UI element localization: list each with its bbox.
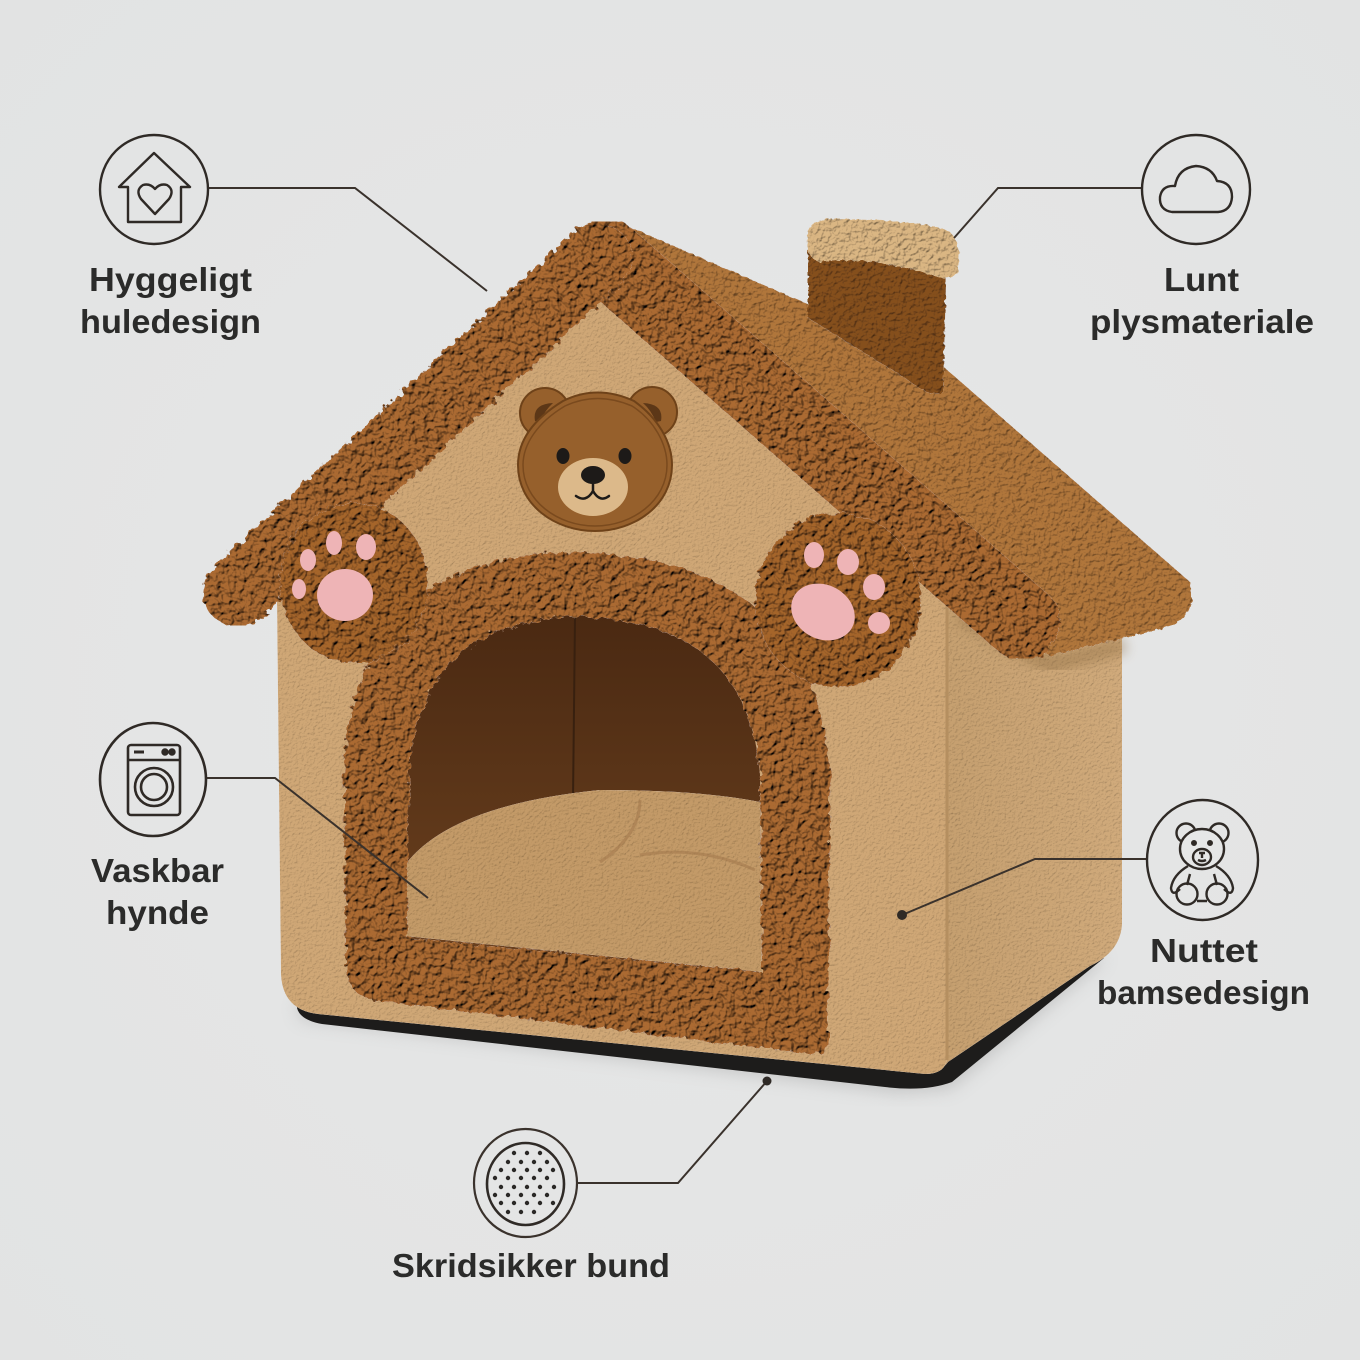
callout: Nuttet bamsedesign (897, 800, 1310, 1011)
label: plysmateriale (1090, 303, 1314, 340)
icon: washing machine (100, 723, 206, 836)
label: huledesign (80, 303, 261, 340)
callout: Skridsikker bund (392, 1076, 772, 1284)
leader line (206, 778, 428, 898)
roof right plane (600, 225, 1192, 656)
label: Vaskbar (91, 852, 224, 889)
leader line (578, 1081, 767, 1183)
label: Lunt (1164, 261, 1239, 298)
back corner of interior (573, 617, 575, 800)
door trim (344, 552, 830, 1054)
callout: Hyggeligt huledesign (80, 135, 487, 340)
product: bear pet house (238, 219, 1192, 1092)
floor shadow (300, 950, 1105, 1092)
shadow under roof on side wall (960, 615, 1125, 665)
front corner seam (946, 600, 948, 1060)
cushion (405, 790, 762, 972)
roof ridge trim left (238, 258, 597, 592)
left paw (280, 503, 428, 663)
label: bamsedesign (1097, 974, 1310, 1011)
chimney (807, 219, 959, 393)
side wall (942, 585, 1122, 1068)
label: hynde (106, 894, 209, 931)
right paw (755, 513, 921, 687)
icon: cloud (1142, 135, 1250, 244)
icon: house with heart (100, 135, 208, 244)
leader line (902, 859, 1148, 915)
leader line (208, 188, 487, 291)
leader line (954, 188, 1142, 238)
icon: teddy bear (1147, 800, 1258, 920)
black non-slip base (297, 900, 1104, 1089)
label: Skridsikker bund (392, 1247, 670, 1284)
chimney cap (807, 219, 959, 278)
cushion tuft (600, 800, 755, 870)
front wall (277, 262, 948, 1074)
embroidered bear face (518, 387, 677, 531)
door opening (405, 615, 762, 975)
callout: Lunt plysmateriale (954, 135, 1314, 340)
roof ridge trim right (608, 258, 1022, 622)
pointer dot (897, 910, 907, 920)
icon: dotted non-slip sole (474, 1129, 577, 1237)
label: Hyggeligt (89, 261, 252, 298)
label: Nuttet (1150, 932, 1258, 969)
callout: Vaskbar hynde (91, 723, 428, 931)
pointer dot (762, 1076, 772, 1086)
